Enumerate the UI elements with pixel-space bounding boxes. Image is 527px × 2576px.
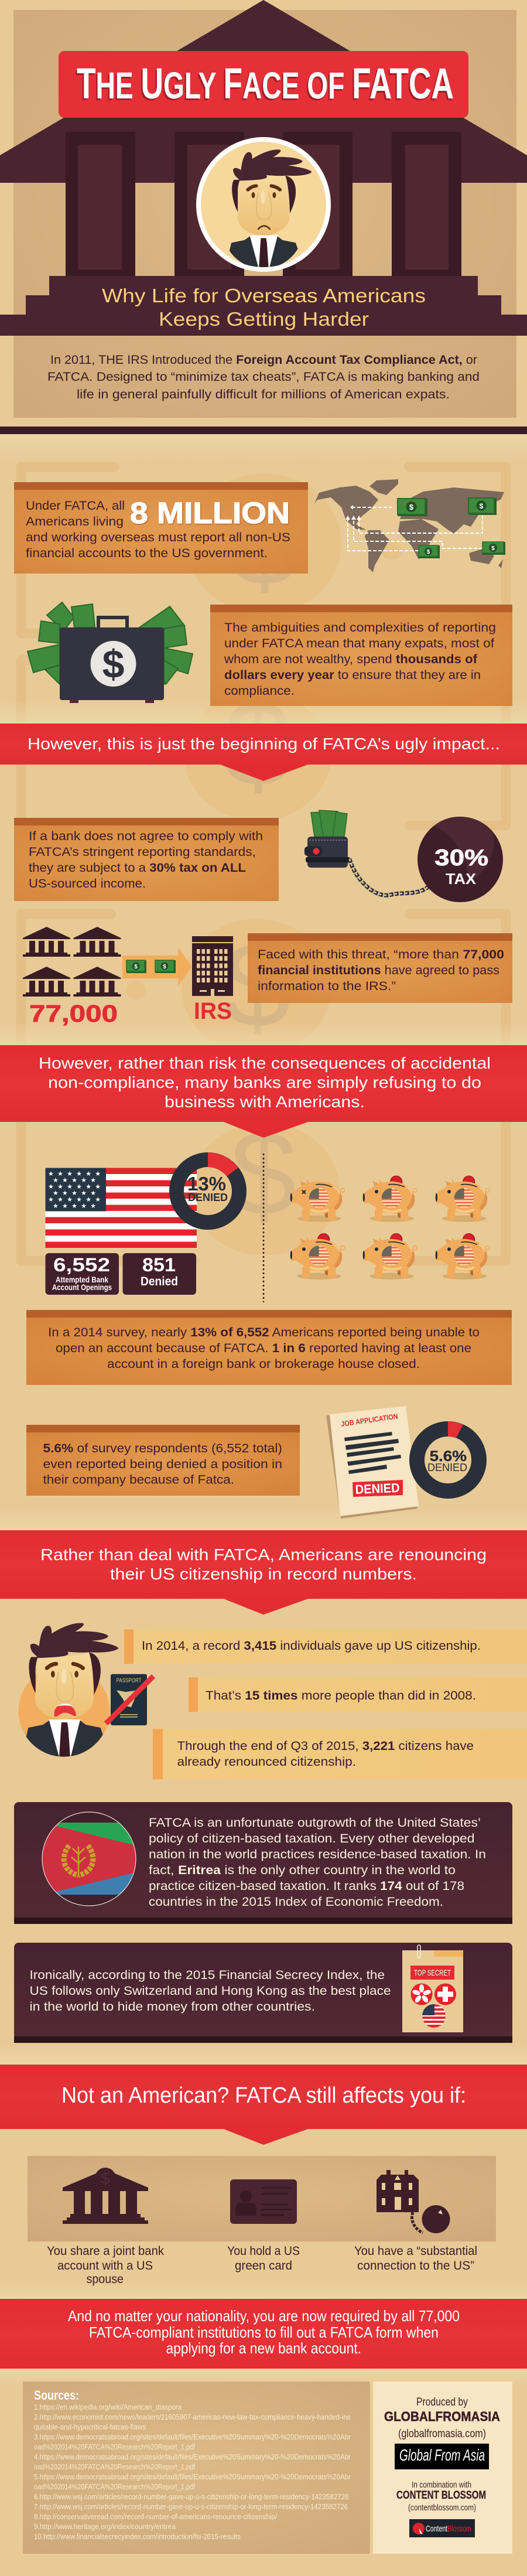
US flag: ★★★★★ [53,1190,100,1197]
panel: sources: quitable-and-hypocritical-fatcas-flaws [34,2423,146,2431]
icon: top secret folder [402,1945,463,2032]
panel: credits: CONTENT BLOSSOM [396,2489,486,2502]
panel: Eritrea: nation in the world practices residence-based taxation. In [149,1848,486,1861]
icon: joint bank: $ [101,2169,110,2188]
banner: beginning of impact [0,724,527,781]
US flag: ★★★★★ [53,1203,100,1210]
icon: crossed passport [106,1674,153,1725]
stat box: denied: Denied [141,1275,178,1288]
piggy banks: 1 in 6 [290,1176,490,1280]
panel: cost of compliance [210,605,512,706]
mouth [54,1704,76,1717]
panel: 2014 survey: In a 2014 survey, nearly 13% of 6,552 Americans reported being unable to [48,1326,480,1339]
world map with bills [314,479,505,572]
panel: sources: 8.http://conservativeread.com/record-number-of-americans-renounce-citizenship/ [34,2512,277,2521]
icon: house with ball and chain [377,2170,450,2233]
panel: credits: In combination with [412,2480,471,2490]
panel: 8 million [14,482,308,574]
panel: 30% tax [14,818,279,901]
bill [398,499,427,516]
icon: green card [230,2179,297,2224]
logo: Content Blossom: ContentBlossom [426,2524,471,2534]
pig 6 [436,1234,490,1280]
big number: 8 million: 8 MILLION [130,496,290,530]
banner: not an American: Not an American? FATCA still affects you if: [61,2083,466,2108]
callout: 3,221 citizens: already renounced citizenship. [177,1755,356,1769]
panel: Eritrea: countries in the 2015 Index of Economic Freedom. [149,1895,443,1909]
US flag [46,1168,197,1248]
US flag: ★★★★★★ [48,1196,104,1203]
banner: no matter your nationality: And no matter your nationality, you are now required by all 77,000 [68,2307,460,2325]
panel: cost of compliance: The ambiguities and complexities of reporting [224,621,496,634]
intro text: FATCA. Designed to “minimize tax cheats”, FATCA is making banking and [47,370,480,384]
donut chart: 5.6% denied: DENIED [427,1462,467,1473]
panel: credits: Produced by [416,2396,468,2408]
panel: credits: (contentblossom.com) [408,2503,476,2513]
icon: job application: DENIED [355,1480,400,1497]
panel: financial secrecy: in the world to hide money from other countries. [29,2000,315,2014]
icon: Eritrea flag [42,1812,136,1906]
panel: denied a position: their company because of Fatca. [43,1473,234,1487]
intro text: life in general painfully difficult for millions of American expats. [77,388,450,401]
panel: affects icons [28,2156,496,2241]
panel: Eritrea: policy of citizen-based taxation. Every other developed [149,1832,474,1845]
panel: cost of compliance: whom are not wealthy, spend thousands of [224,653,478,666]
section divider bar [0,427,527,434]
icon: IRS building: IRS [194,998,232,1024]
icon: job application [326,1406,419,1519]
panel: 8 million: Americans living [26,515,124,528]
panel: financial secrecy: Ironically, according to the 2015 Financial Secrecy Index, the [29,1968,385,1982]
panel: 77,000 institutions: Faced with this threat, “more than 77,000 [258,948,504,961]
donut chart: 5.6% denied [417,1421,479,1491]
panel: sources: 5.https://www.democratsabroad.org/sites/default/files/Executive%20Summary%20-%20Democrats%20Abr [34,2472,351,2481]
panel: 8 million: financial accounts to the US government. [26,547,268,560]
panel: 2014 survey: open an account because of FATCA. 1 in 6 reported having at least one [56,1342,471,1355]
roof [0,0,527,183]
pig 2 [363,1176,417,1222]
donut chart: 5.6% denied: 5.6% [430,1448,467,1465]
pig 4 [290,1234,344,1280]
stat box: denied: 851 [142,1254,176,1275]
panel: 8 million: Under FATCA, all [26,499,125,513]
subtitle [102,285,426,330]
steps [0,276,527,336]
bill: $ [491,545,495,552]
panel: Eritrea: fact, Eritrea is the only other country in the world to [149,1864,456,1877]
caption: joint bank account: account with a US [57,2259,153,2273]
panel: cost of compliance: compliance. [224,684,295,698]
pig 5 [363,1234,417,1280]
panel: 30% tax: FATCA’s stringent reporting standards, [29,845,256,859]
arrow with bills [122,947,192,986]
panel: 77,000 institutions [248,933,512,1003]
callout: 3,221 citizens: Through the end of Q3 of 2015, 3,221 citizens have [177,1739,474,1753]
panel: denied a position: 5.6% of survey respondents (6,552 total) [43,1442,282,1455]
banner: not an American [0,2065,527,2145]
panel: Eritrea: practice citizen-based taxation. It ranks 174 out of 178 [149,1879,464,1893]
caption: substantial connection: connection to the US” [357,2259,474,2273]
panel: 8 million: and working overseas must report all non-US [26,531,290,544]
caption: joint bank account [47,2244,164,2286]
panel: sources: 9.http://www.heritage.org/index/country/eritrea [34,2522,176,2531]
panel: financial secrecy: US follows only Switzerland and Hong Kong as the best place [29,1984,391,1998]
banner: banks refusing: business with Americans. [165,1093,365,1111]
donut chart: 13% denied: 13% [187,1173,226,1195]
watermark: banknote pattern [21,467,506,1261]
icon: joint bank [63,2168,148,2224]
icon: wallet chained to ball: TAX [446,870,477,888]
banner: beginning of impact: However, this is just the beginning of FATCA’s ugly impact... [28,735,500,753]
icon: briefcase of money [28,602,193,703]
arrow with bills: $ [134,964,138,970]
icon: job application: JOB APPLICATION [340,1412,398,1428]
subtitle: Why Life for Overseas Americans [102,285,426,306]
banner: renouncing citizenship: Rather than deal with FATCA, Americans are renouncing [40,1545,487,1564]
bill [468,498,497,515]
US flag: ★★★★★ [53,1177,100,1184]
title banner [59,51,468,118]
panel: Eritrea: FATCA is an unfortunate outgrowth of the United States’ [149,1816,481,1830]
intro text: In 2011, THE IRS Introduced the Foreign Account Tax Compliance Act, or [50,353,477,367]
header: bank building [0,0,527,336]
panel: sources: 10.http://www.financialsecrecyindex.com/introduction/fsi-2015-results [34,2532,241,2541]
subtitle: Keeps Getting Harder [159,308,369,330]
illustration: screaming man [19,1623,119,1759]
callout: 3,221 citizens [153,1729,527,1779]
icon: wallet chained to ball [304,810,503,902]
banner: banks refusing [0,1045,527,1138]
watermark: banknote pattern: $ [230,1106,297,1240]
stat box: denied [123,1253,196,1295]
watermark: banknote pattern: $ [224,918,290,1052]
logo: Global From Asia [395,2444,489,2469]
caption: joint bank account: spouse [87,2273,124,2286]
logo: Global From Asia: Global From Asia [399,2446,485,2464]
panel: sources: 2.http://www.economist.com/news/leaders/21605907-americas-new-law-tax-compliance-heavy-handed-ine [34,2413,351,2421]
US flag: ★★★★★★ [48,1183,104,1190]
banner: banks refusing: non-compliance, many banks are simply refusing to do [48,1073,481,1091]
icon: top secret folder: TOP SECRET [414,1968,451,1977]
donut chart: 13% denied [177,1152,239,1222]
panel: sources: oad%202014%20FATCA%20Research%20Report_1.pdf [34,2482,195,2491]
title banner: THE UGLY FACE OF FATCA [77,59,454,108]
intro text [47,353,480,401]
pig 3 [436,1176,490,1222]
stat box: attempted openings [46,1253,119,1295]
icons: 77,000 banks [23,927,121,1027]
panel: sources [23,2381,370,2554]
panel: cost of compliance: under FATCA mean that many expats, most of [224,637,494,650]
watermark: banknote pattern: $ [224,677,291,811]
panel: 77,000 institutions: information to the IRS.” [258,980,396,993]
panel: sources: 3.https://www.democratsabroad.org/sites/default/files/Executive%20Summary%20-%20Democrats%20Abr [34,2432,351,2441]
caption: joint bank account: You share a joint bank [47,2244,164,2258]
watermark: banknote pattern: $ [231,476,297,610]
caption: green card: You hold a US [227,2244,300,2258]
panel: credits: GLOBALFROMASIA [384,2409,500,2424]
columns [66,132,461,276]
US flag: ★★★★★★ [48,1171,104,1178]
stat box: attempted openings: Account Openings [52,1282,112,1292]
icon: wallet chained to ball: 30% [434,845,488,871]
panel: sources: Sources: [34,2388,79,2403]
bill: $ [427,549,430,555]
panel: denied a position: even reported being denied a position in [43,1458,282,1471]
banner: renouncing citizenship: their US citizenship in record numbers. [110,1565,417,1583]
caption: substantial connection: You have a “substantial [354,2244,477,2258]
panel: sources: 6.http://www.wsj.com/articles/record-number-gave-up-u-s-citizenship-or-long-term-residency-1423582726 [34,2492,349,2501]
icon: crossed passport: PASSPORT [117,1678,142,1684]
caption: green card: green card [235,2259,292,2273]
panel: sources: oad%202014%20FATCA%20Research%20Report_1.pdf [34,2462,195,2471]
panel: sources: 1.https://en.wikipedia.org/wiki/American_diaspora [34,2403,182,2411]
panel: 30% tax: If a bank does not agree to comply with [29,830,263,843]
panel: denied a position [26,1425,300,1496]
stat box: attempted openings: Attempted Bank [56,1275,108,1284]
banner: no matter your nationality: applying for a new bank account. [166,2339,361,2357]
callout: 15 times more: That’s 15 times more people than did in 2008. [206,1689,476,1702]
bill: $ [480,502,484,510]
bill: $ [409,503,414,511]
panel: Eritrea [14,1802,512,1924]
arrow with bills: $ [163,964,166,970]
caption: substantial connection [354,2244,477,2273]
panel: 77,000 institutions: financial institutions have agreed to pass [258,964,499,977]
soft glows around banners [0,434,527,2386]
stat box: attempted openings: 6,552 [53,1254,110,1275]
banner: no matter your nationality: FATCA-compliant institutions to fill out a FATCA form when [89,2323,439,2341]
callout: 15 times more [189,1677,527,1712]
callout: 3,415 individuals [124,1629,527,1664]
callout: 3,415 individuals: In 2014, a record 3,415 individuals gave up US citizenship. [142,1639,481,1653]
panel: sources: 7.http://www.wsj.com/articles/record-number-gave-up-u-s-citizenship-or-long-term-residency-1423582726 [34,2502,348,2511]
logo: Content Blossom [409,2519,475,2537]
icons: 77,000 banks: 77,000 [29,1000,118,1027]
panel: credits [373,2381,512,2554]
panel: credits: (globalfromasia.com) [398,2428,486,2440]
panel: sources: 4.https://www.democratsabroad.org/sites/default/files/Executive%20Summary%20-%20Democrats%20Abr [34,2452,351,2461]
panel: 2014 survey [26,1310,512,1385]
bill [482,542,505,555]
bill [419,545,440,558]
portrait: worried man in oval [196,137,331,272]
panel: 2014 survey: account in a foreign bank or brokerage house closed. [107,1357,420,1371]
banner: no matter your nationality [0,2299,527,2369]
panel: cost of compliance: dollars every year to ensure that they are in [224,668,481,682]
banner: banks refusing: However, rather than risk the consequences of accidental [39,1054,491,1072]
pig: x eye [290,1179,344,1222]
donut chart: 13% denied: DENIED [188,1192,228,1203]
caption: green card [227,2244,300,2273]
icon: IRS building [192,936,233,1024]
panel: sources: oad%202014%20FATCA%20Research%20Report_1.pdf [34,2442,195,2451]
icon: briefcase of money: $ [102,642,124,687]
panel: 30% tax: they are subject to a 30% tax on ALL [29,861,246,875]
panel: 30% tax: US-sourced income. [29,877,146,890]
header panel backdrop [13,10,516,418]
panel: financial secrecy [14,1943,512,2043]
banner: renouncing citizenship [0,1530,527,1615]
